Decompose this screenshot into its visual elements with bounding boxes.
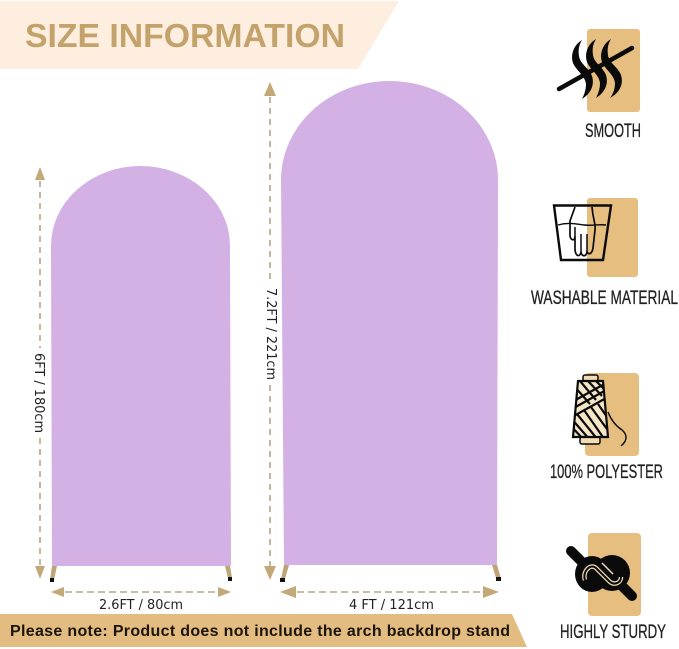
- height arrow: small arch: [35, 167, 45, 579]
- small arch: [50, 166, 232, 582]
- feature: polyester: [550, 373, 663, 483]
- large arch: [280, 81, 501, 582]
- width label: large arch: 4 FT / 121cm: [349, 598, 434, 613]
- width arrow: small arch: [51, 587, 231, 597]
- icon: smooth: [559, 39, 632, 99]
- width label: small arch: 2.6FT / 80cm: [99, 598, 183, 613]
- feature: highly sturdy: [560, 533, 666, 643]
- height label: small arch: 6FT / 180cm: [31, 353, 46, 433]
- title banner: [0, 1, 399, 69]
- feature: smooth: [559, 29, 641, 142]
- icon: knot: [571, 551, 632, 596]
- label: smooth: SMOOTH: [585, 121, 641, 142]
- width arrow: large arch: [280, 586, 499, 598]
- icon: hand in water: [554, 206, 611, 260]
- title banner: SIZE INFORMATION: [25, 17, 345, 54]
- feature: washable material: [531, 198, 678, 309]
- height arrow: large arch: [264, 82, 276, 580]
- icon: thread spool: [570, 375, 626, 446]
- note bar: [0, 614, 527, 647]
- height label: large arch: 7.2FT / 221cm: [263, 288, 278, 380]
- note bar: Please note: Product does not include the arch backdrop stand: [10, 623, 510, 640]
